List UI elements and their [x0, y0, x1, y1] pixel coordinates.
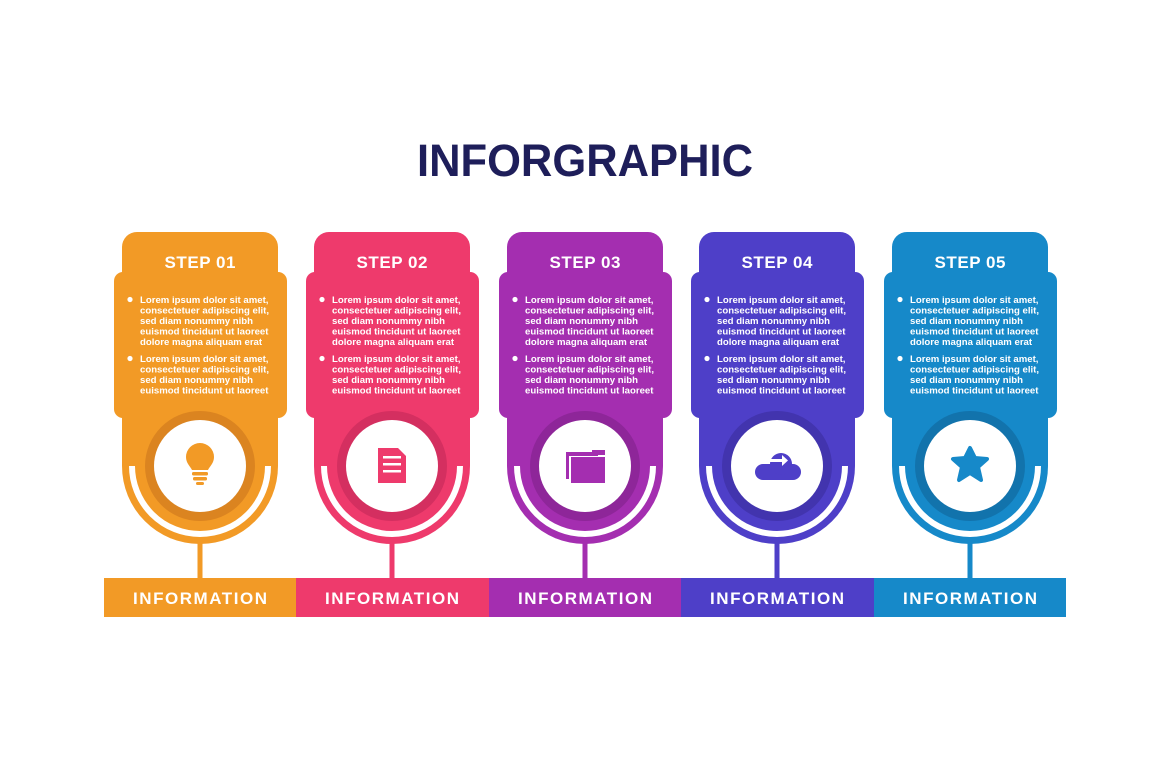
- icon: document: [378, 448, 406, 483]
- label: information 4: [681, 578, 874, 617]
- info bar: [104, 578, 1066, 617]
- icon: light bulb: [186, 443, 214, 485]
- icon: cloud: [755, 453, 801, 480]
- title: INFORGRAPHIC: [417, 135, 753, 186]
- label: information 1: [104, 578, 297, 617]
- text block: step 01: [127, 295, 269, 396]
- label: information 3: [489, 578, 682, 617]
- panel: step 02: [306, 232, 479, 580]
- text block: step 05: [897, 295, 1039, 396]
- icon: folders: [566, 450, 605, 483]
- panel: step 03: [499, 232, 672, 580]
- label: information 4: INFORMATION: [710, 589, 844, 608]
- heading: step 05: STEP 05: [934, 253, 1006, 272]
- heading: step 02: STEP 02: [356, 253, 428, 272]
- text block: step 02: [319, 295, 461, 396]
- label: information 2: [296, 578, 489, 617]
- text block: step 04: [704, 295, 846, 396]
- label: information 5: INFORMATION: [903, 589, 1037, 608]
- panel: step 01: [114, 232, 287, 580]
- label: information 1: INFORMATION: [133, 589, 267, 608]
- label: information 2: INFORMATION: [325, 589, 459, 608]
- icon: star: [953, 448, 987, 480]
- heading: step 01: STEP 01: [164, 253, 236, 272]
- panel: step 04: [691, 232, 864, 580]
- text block: step 03: [512, 295, 654, 396]
- panel: step 05: [884, 232, 1057, 580]
- label: information 5: [874, 578, 1066, 617]
- label: information 3: INFORMATION: [518, 589, 652, 608]
- heading: step 04: STEP 04: [742, 253, 813, 272]
- heading: step 03: STEP 03: [550, 253, 620, 272]
